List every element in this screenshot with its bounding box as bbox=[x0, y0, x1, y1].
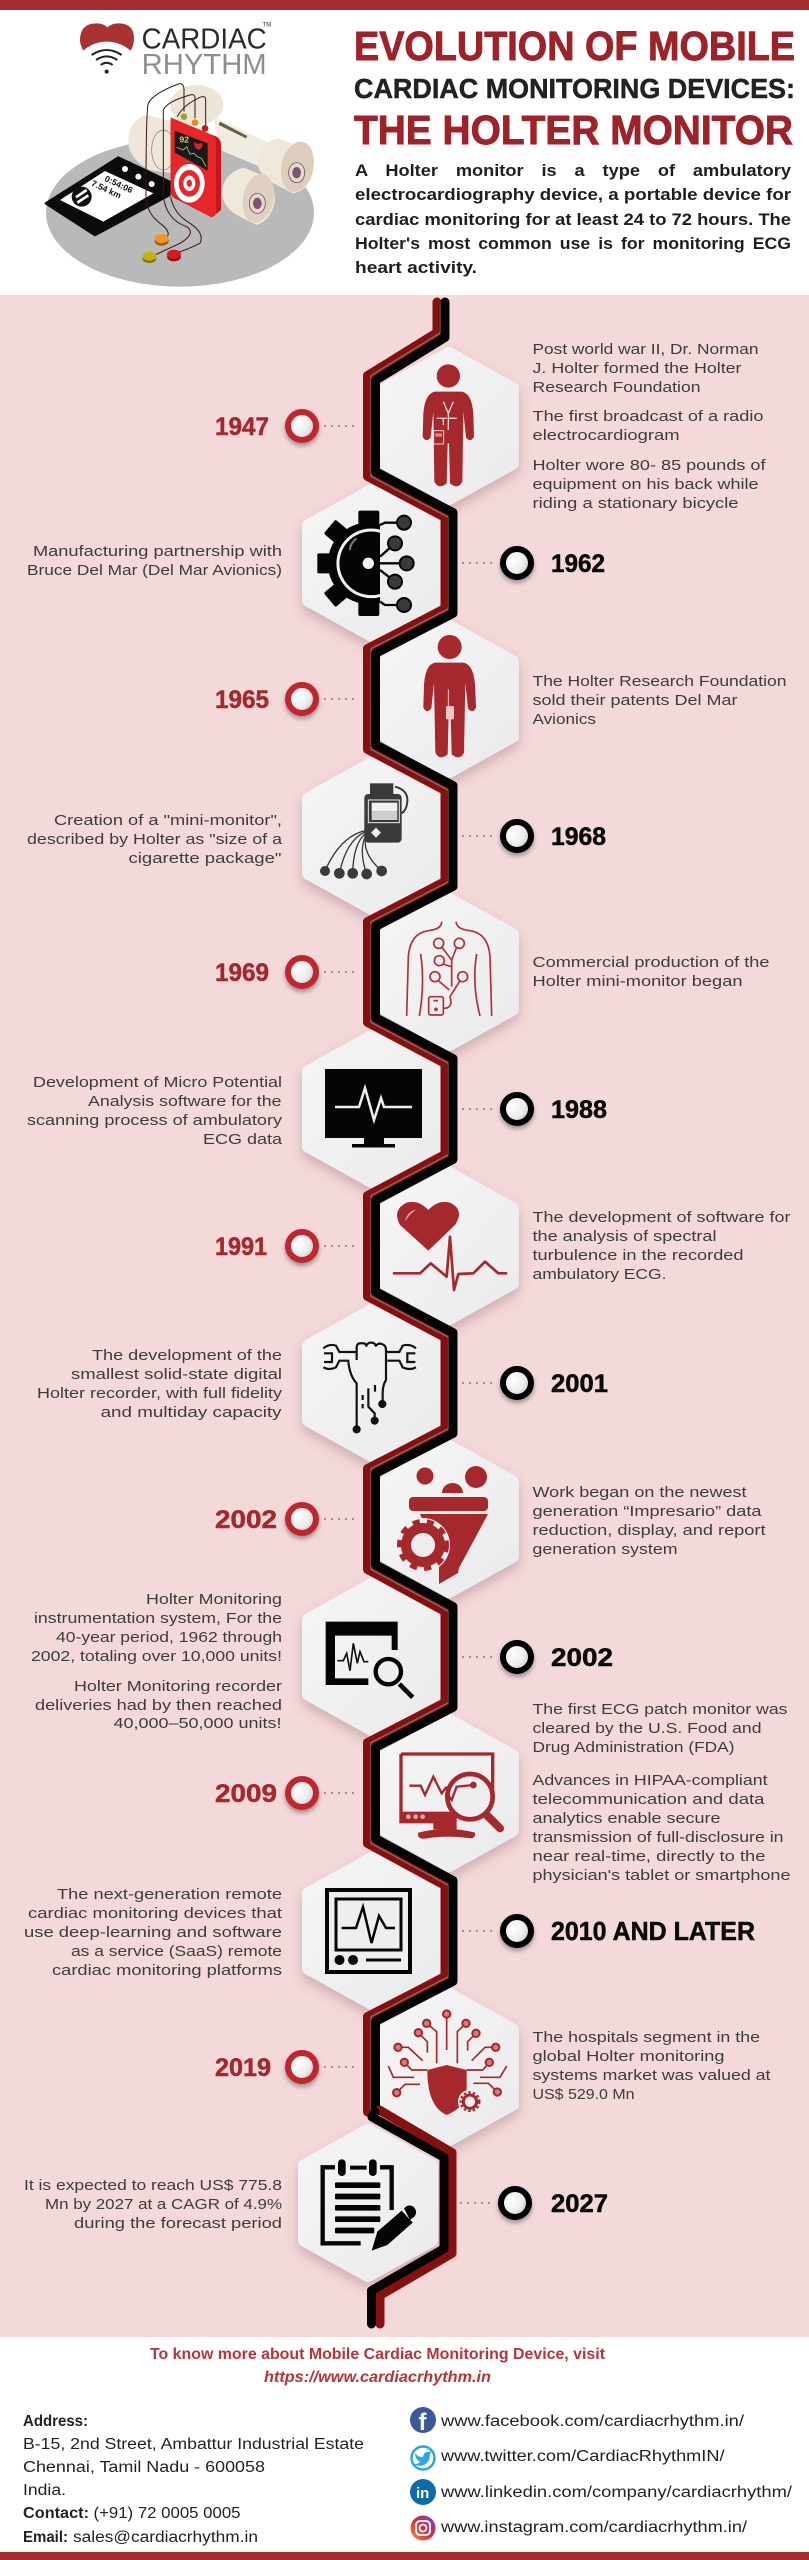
text: 2010 and later: cardiac monitoring devices that bbox=[28, 1905, 283, 1922]
icon: window with ECG and magnifier bbox=[326, 1622, 413, 1697]
text: 2009: analytics enable secure bbox=[532, 1810, 720, 1827]
text: 2002 right: generation system bbox=[532, 1541, 678, 1558]
illustration: holter device with dumbbells: 0:54:06 bbox=[103, 173, 135, 195]
text: 1968: cigarette package" bbox=[128, 850, 282, 867]
text: 1991 bbox=[532, 1209, 790, 1283]
logo: Cardiac Rhythm: TM bbox=[263, 23, 271, 29]
icon: gear with circuit nodes bbox=[317, 511, 414, 616]
dotted connectors bbox=[324, 426, 497, 2203]
social: linkedin bbox=[410, 2479, 793, 2505]
icon: red monitor with magnifier bbox=[399, 1754, 500, 1839]
text: 1969: Holter mini-monitor began bbox=[532, 973, 742, 990]
hexagon tiles bbox=[305, 354, 512, 2275]
call to action: https://www.cardiacrhythm.in bbox=[264, 2369, 491, 2386]
years: right column bbox=[551, 550, 755, 2218]
text: 2010 and later: cardiac monitoring platforms bbox=[52, 1962, 282, 1979]
text: 2002 right: Work began on the newest bbox=[532, 1484, 747, 1501]
intro paragraph: Holter's most common use is for monitoring ECG bbox=[355, 234, 791, 253]
bottom bar bbox=[0, 2552, 809, 2560]
text: 2001: and multiday capacity bbox=[101, 1404, 282, 1421]
text: 2002 right: reduction, display, and report bbox=[532, 1522, 766, 1539]
text: 1988: ECG data bbox=[203, 1131, 283, 1148]
title: THE HOLTER MONITOR bbox=[354, 107, 793, 153]
text: 1947: Holter wore 80- 85 pounds of bbox=[532, 457, 766, 474]
text: 1968 bbox=[27, 812, 283, 867]
text: 2002 right: generation “Impresario” data bbox=[532, 1503, 762, 1520]
text: 2002 left bbox=[31, 1591, 282, 1732]
social: linkedin: www.linkedin.com/company/cardiacrhythm/ bbox=[440, 2484, 793, 2501]
text: 2027: It is expected to reach US$ 775.8 bbox=[24, 2177, 282, 2194]
text: 2009: telecommunication and data bbox=[532, 1791, 765, 1808]
intro paragraph: cardiac monitoring for at least 24 to 72 hours. The bbox=[355, 210, 791, 229]
text: 1969: Commercial production of the bbox=[532, 954, 770, 971]
social: facebook bbox=[410, 2407, 745, 2436]
text: 2002 left: Holter Monitoring recorder bbox=[74, 1678, 282, 1695]
text: 2001: smallest solid-state digital bbox=[71, 1366, 282, 1383]
text: 2019: systems market was valued at bbox=[532, 2067, 771, 2084]
years: right column: 2001 bbox=[551, 1370, 608, 1398]
text: 1968: Creation of a "mini-monitor", bbox=[54, 812, 282, 829]
timeline background panel bbox=[0, 295, 809, 2337]
text: 2010 and later: The next-generation remote bbox=[57, 1886, 282, 1903]
years: right column: 1962 bbox=[551, 550, 605, 578]
years: left column: 1965 bbox=[215, 686, 269, 714]
text: 2010 and later: as a service (SaaS) remote bbox=[71, 1943, 282, 1960]
years: left column: 2002 bbox=[215, 1506, 277, 1534]
text: 1947: equipment on his back while bbox=[532, 476, 758, 493]
text: 1988: Development of Micro Potential bbox=[33, 1074, 282, 1091]
text: 2009: near real-time, directly to the bbox=[532, 1848, 766, 1865]
icon: heart with pulse bbox=[394, 1202, 506, 1290]
text: 2019: The hospitals segment in the bbox=[532, 2029, 760, 2046]
text: 1991: The development of software for bbox=[532, 1209, 790, 1226]
text: 2009: physician's tablet or smartphone bbox=[532, 1867, 790, 1884]
years: right column: 2010 AND LATER bbox=[551, 1916, 755, 1946]
text: 2027: Mn by 2027 at a CAGR of 4.9% bbox=[45, 2196, 282, 2213]
text: 1947 bbox=[532, 341, 766, 512]
text: 2009: Advances in HIPAA-compliant bbox=[532, 1772, 768, 1789]
text: 2002 left: 40,000–50,000 units! bbox=[114, 1715, 282, 1732]
social: instagram bbox=[410, 2516, 748, 2540]
text: 1991: turbulence in the recorded bbox=[532, 1247, 744, 1264]
snake timeline line bbox=[368, 302, 453, 2324]
icon: person with hip monitor bbox=[423, 635, 476, 757]
text: 2002 left: Holter Monitoring bbox=[146, 1591, 282, 1608]
intro paragraph: A Holter monitor is a type of ambulatory bbox=[355, 161, 792, 180]
icon: notepad with pencil bbox=[323, 2159, 416, 2251]
text: 2001: The development of the bbox=[92, 1347, 282, 1364]
icon: person with chest wires bbox=[423, 364, 474, 486]
years: right column: 2002 bbox=[551, 1644, 613, 1672]
text: 2009: cleared by the U.S. Food and bbox=[532, 1720, 762, 1737]
text: 1965: sold their patents Del Mar bbox=[532, 692, 738, 709]
years: right column: 2027 bbox=[551, 2190, 608, 2218]
text: 2009: The first ECG patch monitor was bbox=[532, 1701, 788, 1718]
call to action bbox=[150, 2346, 605, 2386]
text: 1965 bbox=[532, 673, 786, 728]
text: 1947: J. Holter formed the Holter bbox=[532, 360, 742, 377]
title bbox=[354, 23, 795, 153]
social: linkedin: in bbox=[416, 2485, 429, 2502]
text: 2019: US$ 529.0 Mn bbox=[532, 2086, 634, 2103]
call to action: To know more about Mobile Cardiac Monitoring Device, visit bbox=[150, 2346, 605, 2363]
social: twitter: www.twitter.com/CardiacRhythmIN/ bbox=[440, 2448, 725, 2465]
text: 2002 left: instrumentation system, For the bbox=[34, 1610, 282, 1627]
illustration: holter device with dumbbells: 92 bbox=[179, 135, 189, 145]
contact block: Email: bbox=[23, 2529, 68, 2546]
text: 1991: ambulatory ECG. bbox=[532, 1266, 666, 1283]
text: 2002 left: 40-year period, 1962 through bbox=[56, 1629, 282, 1646]
years: right column: 1988 bbox=[551, 1096, 607, 1124]
text: 2002 right bbox=[532, 1484, 766, 1558]
text: 1947: The first broadcast of a radio bbox=[532, 408, 764, 425]
social: twitter bbox=[412, 2446, 725, 2470]
logo: Cardiac Rhythm: RHYTHM bbox=[142, 49, 267, 81]
years: left column bbox=[215, 413, 277, 2082]
text: 1965: Avionics bbox=[532, 711, 596, 728]
social: facebook: f bbox=[418, 2409, 428, 2436]
contact block: (+91) 72 0005 0005 bbox=[94, 2505, 241, 2522]
social: facebook: www.facebook.com/cardiacrhythm.in/ bbox=[440, 2413, 745, 2430]
icon: tablet monitor with ECG bbox=[327, 1890, 410, 1972]
year markers: black bbox=[501, 549, 531, 2217]
contact block: sales@cardiacrhythm.in bbox=[73, 2529, 258, 2546]
intro paragraph bbox=[355, 161, 792, 277]
icon: funnel with gear bbox=[396, 1466, 488, 1584]
text: 1962 bbox=[27, 543, 282, 579]
text: 2001: Holter recorder, with full fidelity bbox=[37, 1385, 283, 1402]
year markers: red bbox=[288, 412, 316, 2081]
title: CARDIAC MONITORING DEVICES: bbox=[354, 73, 795, 104]
icon: torso with electrodes bbox=[407, 922, 492, 1016]
logo: Cardiac Rhythm: CARDIAC bbox=[142, 23, 267, 55]
contact block: Chennai, Tamil Nadu - 600058 bbox=[23, 2459, 265, 2476]
contact block: Address: bbox=[23, 2413, 88, 2430]
years: right column: 1968 bbox=[551, 823, 606, 851]
contact block: Contact: bbox=[23, 2505, 89, 2522]
text: 2010 and later: use deep-learning and software bbox=[24, 1924, 282, 1941]
years: left column: 1991 bbox=[215, 1233, 267, 1261]
icon: shield with circuits and gear bbox=[388, 2010, 507, 2115]
text: 1991: the analysis of spectral bbox=[532, 1228, 716, 1245]
text: 1965: The Holter Research Foundation bbox=[532, 673, 786, 690]
top bar bbox=[0, 0, 809, 10]
text: 1947: Research Foundation bbox=[532, 379, 700, 396]
text: 2019: global Holter monitoring bbox=[532, 2048, 724, 2065]
text: 1969 bbox=[532, 954, 770, 990]
years: left column: 2009 bbox=[215, 1780, 277, 1808]
text: 1947: Post world war II, Dr. Norman bbox=[532, 341, 758, 358]
text: 2002 left: deliveries had by then reached bbox=[35, 1697, 282, 1714]
text: 1988 bbox=[27, 1074, 283, 1148]
years: left column: 1947 bbox=[215, 413, 269, 441]
text: 1988: scanning process of ambulatory bbox=[27, 1112, 283, 1129]
icon: black monitor with ECG bbox=[325, 1069, 422, 1148]
years: left column: 2019 bbox=[215, 2054, 271, 2082]
text: 1947: electrocardiogram bbox=[532, 427, 680, 444]
social: instagram: www.instagram.com/cardiacrhythm.in/ bbox=[440, 2519, 748, 2536]
illustration: holter device with dumbbells bbox=[46, 84, 318, 287]
icon: hand gripping wrench with circuits bbox=[323, 1343, 416, 1432]
intro paragraph: heart activity. bbox=[355, 258, 477, 277]
text: 1968: described by Holter as "size of a bbox=[27, 831, 283, 848]
text: 2009: Drug Administration (FDA) bbox=[532, 1739, 734, 1756]
text: 1962: Bruce Del Mar (Del Mar Avionics) bbox=[27, 562, 282, 579]
text: 2009: transmission of full-disclosure in bbox=[532, 1829, 784, 1846]
illustration: holter device with dumbbells: 7.54 km bbox=[90, 178, 123, 201]
text: 2027: during the forecast period bbox=[74, 2215, 282, 2232]
intro paragraph: electrocardiography device, a portable device for bbox=[355, 185, 791, 204]
text: 1947: riding a stationary bicycle bbox=[532, 495, 738, 512]
text: 2010 and later bbox=[24, 1886, 283, 1979]
text: 2002 left: 2002, totaling over 10,000 units! bbox=[31, 1648, 282, 1665]
text: 2001 bbox=[37, 1347, 283, 1421]
text: 2009 bbox=[532, 1701, 790, 1884]
text: 2019 bbox=[532, 2029, 771, 2103]
years: left column: 1969 bbox=[215, 959, 269, 987]
contact block: India. bbox=[23, 2482, 66, 2499]
text: 1988: Analysis software for the bbox=[88, 1093, 282, 1110]
text: 2027 bbox=[24, 2177, 282, 2232]
text: 1962: Manufacturing partnership with bbox=[33, 543, 282, 560]
logo: Cardiac Rhythm bbox=[80, 23, 271, 81]
contact block bbox=[23, 2413, 364, 2546]
icon: holter mini monitor with leads bbox=[320, 783, 407, 879]
contact block: B-15, 2nd Street, Ambattur Industrial Estate bbox=[23, 2436, 364, 2453]
